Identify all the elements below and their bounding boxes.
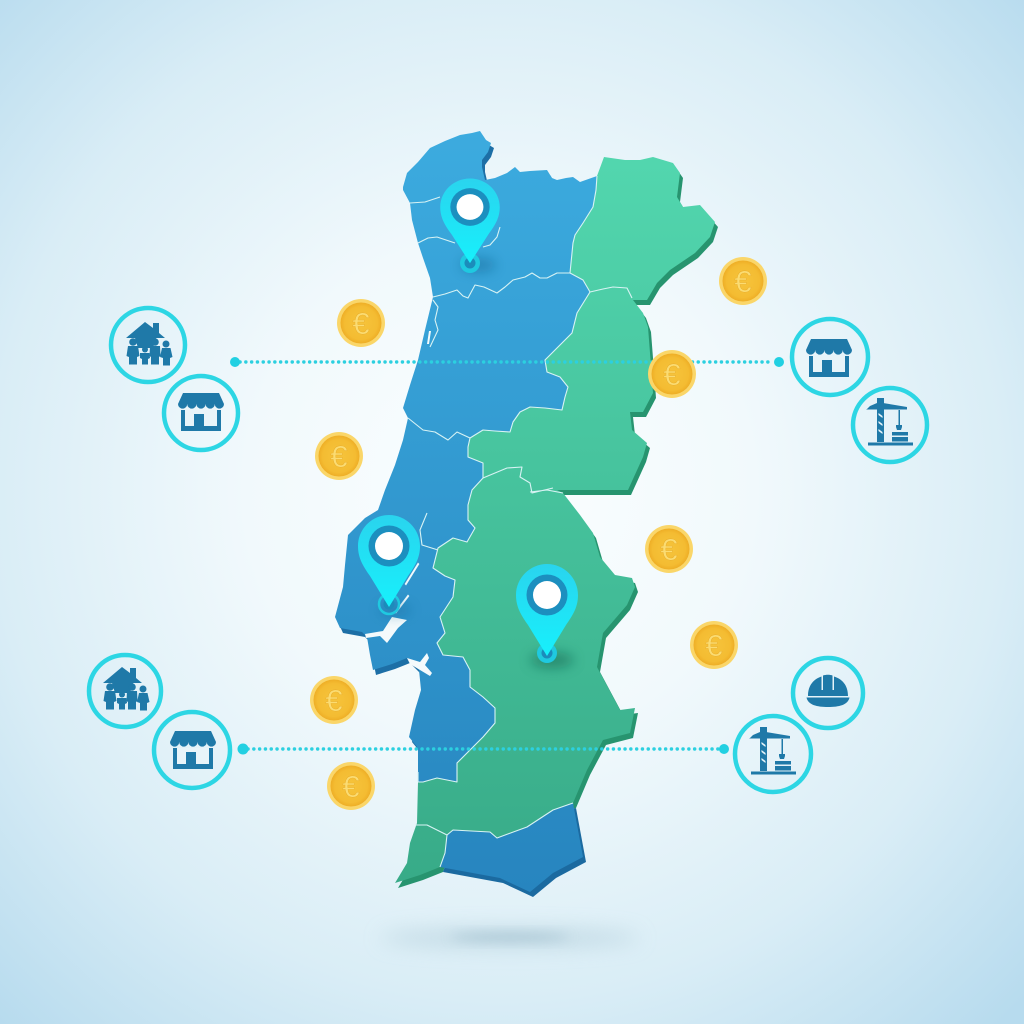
- regional borders: [408, 176, 632, 867]
- connector line: bottom: [238, 744, 729, 754]
- map extruded edge: [338, 136, 718, 897]
- coin 3: €: [663, 357, 681, 392]
- coin 3: [648, 350, 696, 398]
- pin: Alentejo: [516, 564, 578, 668]
- coin 2: [719, 257, 767, 305]
- coin 6: [690, 621, 738, 669]
- green regions: [395, 157, 715, 883]
- coin 7: [310, 676, 358, 724]
- river estuaries: [365, 331, 432, 676]
- icon: crane, lower right: [735, 716, 811, 792]
- euro coins: [310, 257, 767, 810]
- pin: north: [440, 178, 500, 273]
- coin 8: [327, 762, 375, 810]
- icon: family home, upper left: [111, 308, 185, 382]
- coin 4: €: [330, 439, 348, 474]
- connector line: top: [230, 357, 784, 367]
- icon: family home, lower left: [89, 655, 161, 727]
- map ground shadow: [380, 928, 640, 948]
- coin 5: €: [660, 532, 678, 567]
- coin 8: €: [342, 769, 360, 804]
- coin 6: €: [705, 628, 723, 663]
- southern blue region: [440, 803, 583, 892]
- coin 1: [337, 299, 385, 347]
- icon: crane, upper right: [853, 388, 927, 462]
- icon: shop, lower left: [154, 712, 230, 788]
- coin 5: [645, 525, 693, 573]
- blue regions: [335, 131, 597, 782]
- pin: Lisbon: [358, 515, 420, 616]
- map of Portugal: [335, 131, 718, 897]
- coin 7: €: [325, 683, 343, 718]
- coin 4: [315, 432, 363, 480]
- coin 1: €: [352, 306, 370, 341]
- coin 2: €: [734, 264, 752, 299]
- icon: hard hat, lower right: [793, 658, 863, 728]
- icon: shop, upper right: [792, 319, 868, 395]
- icon: shop, upper left: [164, 376, 238, 450]
